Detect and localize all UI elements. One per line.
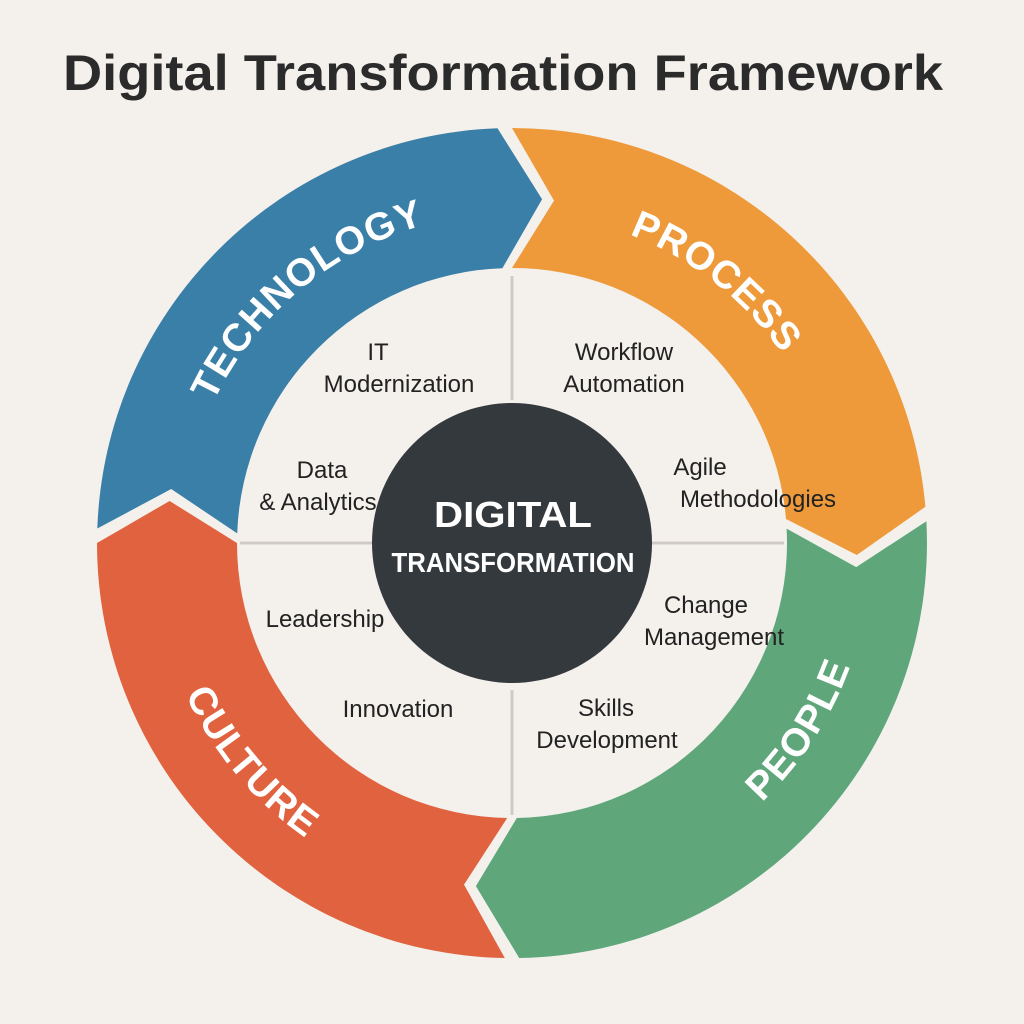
segment: process: PROCESS — [632, 210, 800, 350]
center hub — [372, 403, 652, 683]
inner items: Development — [536, 727, 678, 754]
inner items: Automation — [563, 371, 685, 398]
segment: technology: TECHNOLOGY — [190, 199, 416, 394]
inner items: Workflow — [575, 339, 674, 366]
inner items: Innovation — [343, 696, 453, 723]
segment: process — [512, 128, 926, 555]
inner items: Methodologies — [680, 486, 836, 513]
inner items: IT — [367, 339, 389, 366]
inner items: Data — [297, 457, 348, 484]
segment: culture — [97, 501, 508, 958]
inner items: Management — [644, 624, 784, 651]
inner items — [259, 339, 836, 754]
center hub: DIGITAL — [434, 494, 592, 535]
title: Digital Transformation Framework — [63, 45, 943, 101]
segment: people — [476, 521, 927, 958]
inner items: Change — [664, 592, 748, 619]
inner items: Leadership — [266, 606, 384, 633]
segment: people: PEOPLE — [744, 658, 850, 801]
inner items: & Analytics — [259, 489, 377, 516]
inner items: Modernization — [324, 371, 474, 398]
segment: culture: CULTURE — [190, 688, 320, 838]
segment: technology — [97, 128, 542, 534]
inner items: Skills — [578, 695, 634, 722]
inner items: Agile — [673, 454, 727, 481]
center hub: TRANSFORMATION — [392, 547, 634, 578]
